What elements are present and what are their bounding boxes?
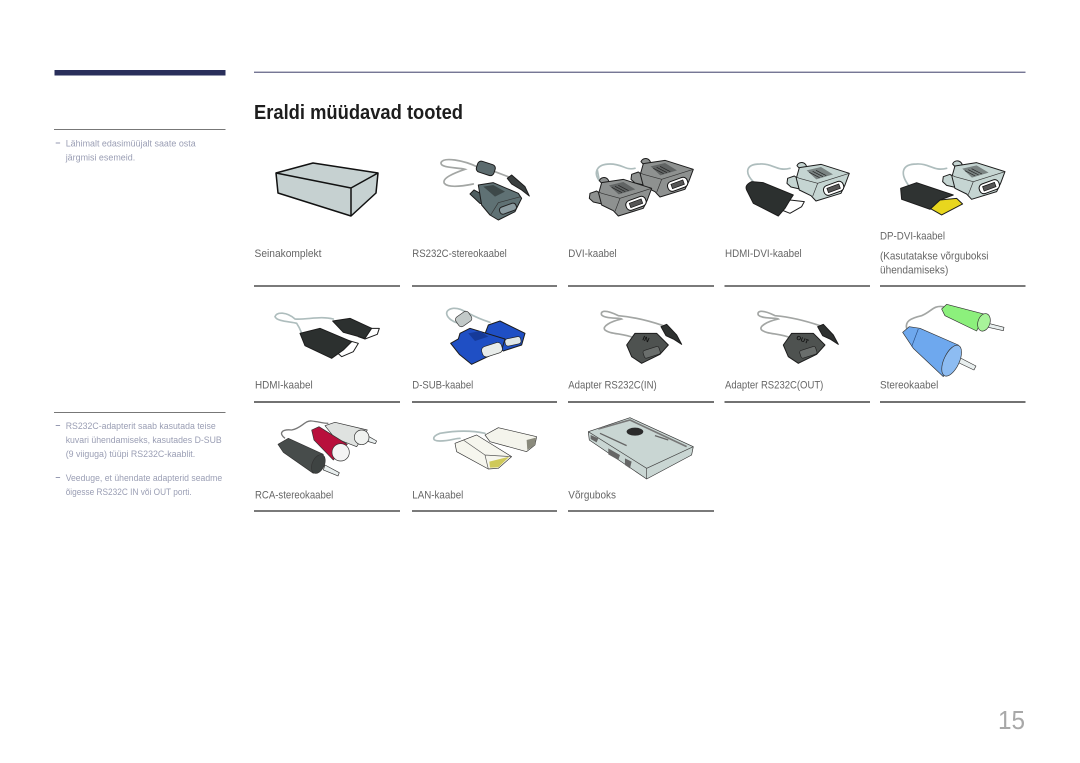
sidebar note: adapters: RS232C-adapterit saab kasutada teise bbox=[66, 421, 216, 431]
item: Seinakomplekt bbox=[254, 163, 400, 286]
item: LAN-kaabel bbox=[412, 428, 557, 511]
sidebar note: adapters: kuvari ühendamiseks, kasutades D-SUB bbox=[66, 435, 222, 445]
sidebar note: purchase: Lähimalt edasimüüjalt saate osta bbox=[66, 138, 196, 148]
item: Adapter RS232C(OUT) bbox=[724, 311, 870, 402]
icon: D-SUB cable bbox=[447, 308, 525, 364]
label: RS232C-stereokaabel bbox=[412, 248, 507, 260]
sidebar header bar bbox=[54, 70, 226, 76]
icon: adapter IN: IN bbox=[641, 335, 650, 344]
top rule bbox=[254, 72, 1026, 73]
sidebar note: adapters bbox=[54, 412, 226, 497]
icon: LAN cable bbox=[434, 428, 537, 469]
page number: 15 bbox=[998, 705, 1025, 735]
label: note line 2: ühendamiseks) bbox=[880, 264, 948, 276]
item: Adapter RS232C(IN) bbox=[568, 311, 714, 402]
item: Stereokaabel bbox=[880, 304, 1026, 402]
icon: wall mount box bbox=[276, 163, 378, 216]
item: HDMI-DVI-kaabel bbox=[724, 163, 870, 286]
icon: HDMI-DVI cable bbox=[746, 163, 849, 216]
title: Eraldi müüdavad tooted bbox=[254, 102, 463, 124]
label: Võrguboks bbox=[568, 490, 616, 502]
label: DP-DVI-kaabel bbox=[880, 230, 945, 242]
sidebar note: adapters: (9 viiguga) tüüpi RS232C-kaablit. bbox=[66, 449, 195, 459]
item: RS232C-stereokaabel bbox=[412, 160, 557, 286]
icon: DP-DVI cable bbox=[901, 161, 1005, 215]
item: DP-DVI-kaabel bbox=[880, 161, 1026, 286]
label: DVI-kaabel bbox=[568, 248, 617, 260]
icon: stereo cable bbox=[903, 304, 1004, 379]
item: DVI-kaabel bbox=[568, 159, 714, 286]
label: Seinakomplekt bbox=[254, 248, 322, 260]
icon: RCA stereo cable bbox=[278, 421, 377, 476]
label: Adapter RS232C(IN) bbox=[568, 380, 657, 392]
label: note: (Kasutatakse võrguboksi bbox=[880, 250, 988, 262]
item: Võrguboks bbox=[568, 418, 714, 511]
label: LAN-kaabel bbox=[412, 490, 463, 502]
label: HDMI-kaabel bbox=[255, 380, 313, 392]
item: D-SUB-kaabel bbox=[412, 308, 557, 402]
icon: RS232C stereo cable bbox=[441, 160, 529, 220]
label: Stereokaabel bbox=[880, 380, 938, 392]
label: Adapter RS232C(OUT) bbox=[725, 380, 823, 392]
sidebar note: adapters: Veeduge, et ühendate adapterid seadme bbox=[66, 473, 222, 483]
item: HDMI-kaabel bbox=[254, 313, 400, 402]
icon: adapter IN bbox=[601, 311, 682, 363]
icon: HDMI cable bbox=[275, 313, 379, 358]
icon: adapter OUT: OUT bbox=[795, 335, 809, 346]
label: RCA-stereokaabel bbox=[255, 490, 333, 502]
icon: adapter OUT bbox=[758, 311, 838, 363]
icon: network box bbox=[588, 418, 693, 479]
icon: DVI cable bbox=[589, 159, 693, 216]
label: HDMI-DVI-kaabel bbox=[725, 248, 802, 260]
sidebar note: purchase bbox=[54, 129, 226, 162]
sidebar note: adapters: õigesse RS232C IN või OUT porti. bbox=[66, 487, 192, 497]
item: RCA-stereokaabel bbox=[254, 421, 400, 511]
label: D-SUB-kaabel bbox=[412, 380, 473, 392]
sidebar note: purchase: järgmisi esemeid. bbox=[65, 152, 135, 162]
